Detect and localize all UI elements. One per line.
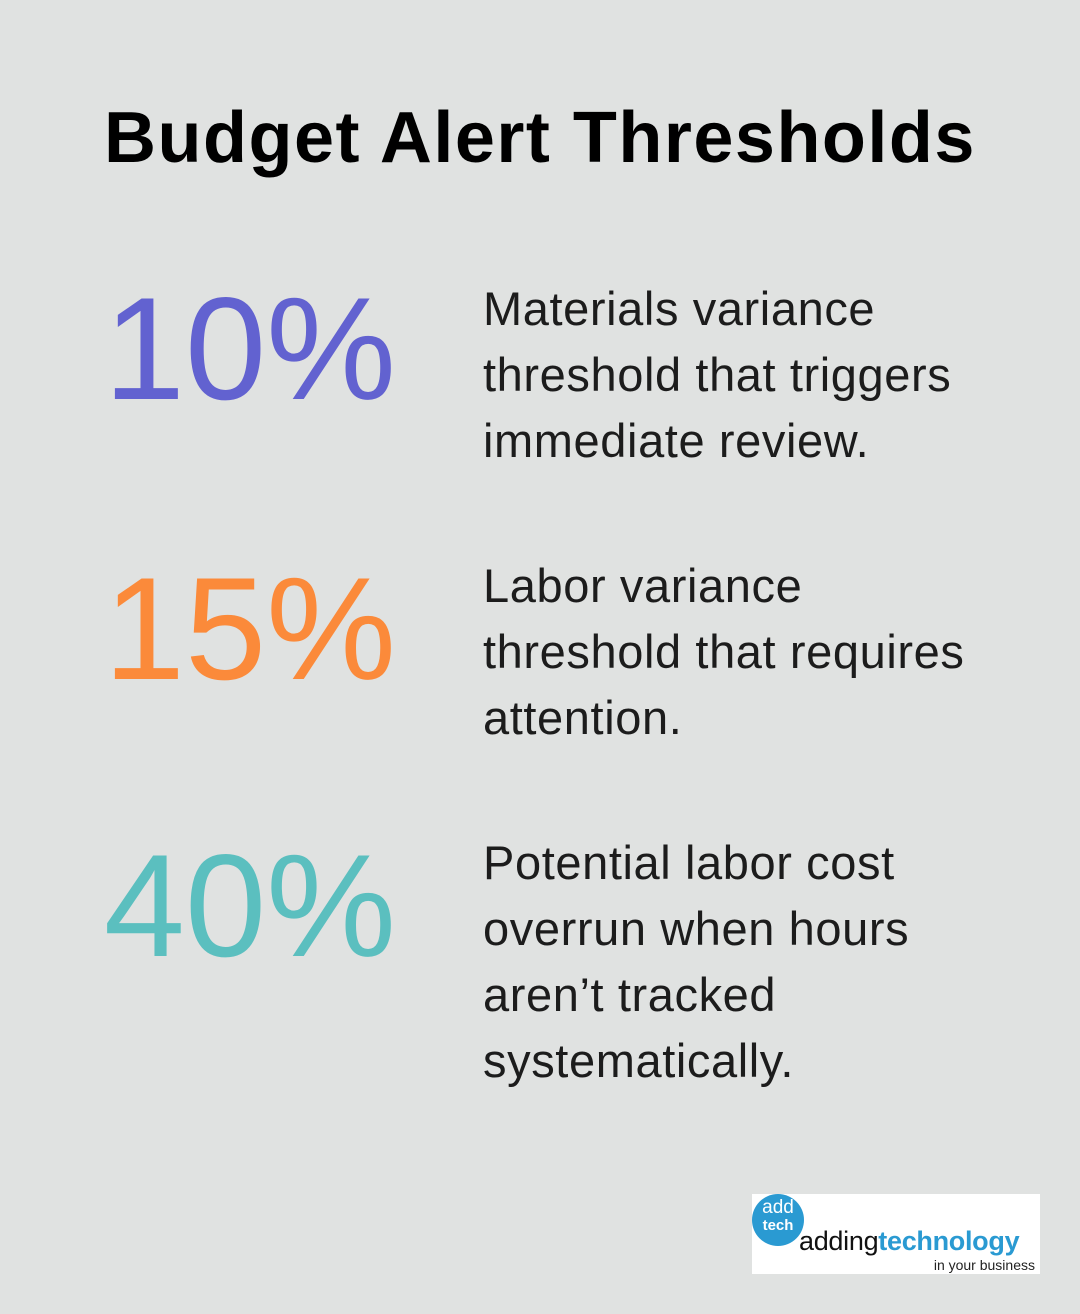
description 3: systematically.: [483, 1034, 794, 1087]
description 1: Materials variance: [483, 282, 875, 335]
description 3: overrun when hours: [483, 902, 909, 955]
description 1: threshold that triggers: [483, 348, 951, 401]
stat 10%: 10%: [104, 267, 396, 430]
description 2: [483, 559, 964, 744]
description 3: Potential labor cost: [483, 836, 895, 889]
stat 15%: 15%: [104, 547, 396, 710]
logo circle: add: [762, 1197, 794, 1218]
description 3: aren’t tracked: [483, 968, 776, 1021]
logo circle: [752, 1194, 804, 1246]
logo: in your business: [934, 1257, 1035, 1273]
title: Budget Alert Thresholds: [104, 98, 976, 178]
description 1: immediate review.: [483, 414, 869, 467]
stat 40%: 40%: [104, 824, 396, 987]
description 2: Labor variance: [483, 559, 802, 612]
logo text: addingtechnology: [799, 1226, 1019, 1256]
description 2: threshold that requires: [483, 625, 964, 678]
description 1: [483, 282, 951, 467]
logo: [752, 1194, 1040, 1274]
logo circle: tech: [763, 1217, 793, 1234]
description 2: attention.: [483, 691, 682, 744]
description 3: [483, 836, 909, 1087]
